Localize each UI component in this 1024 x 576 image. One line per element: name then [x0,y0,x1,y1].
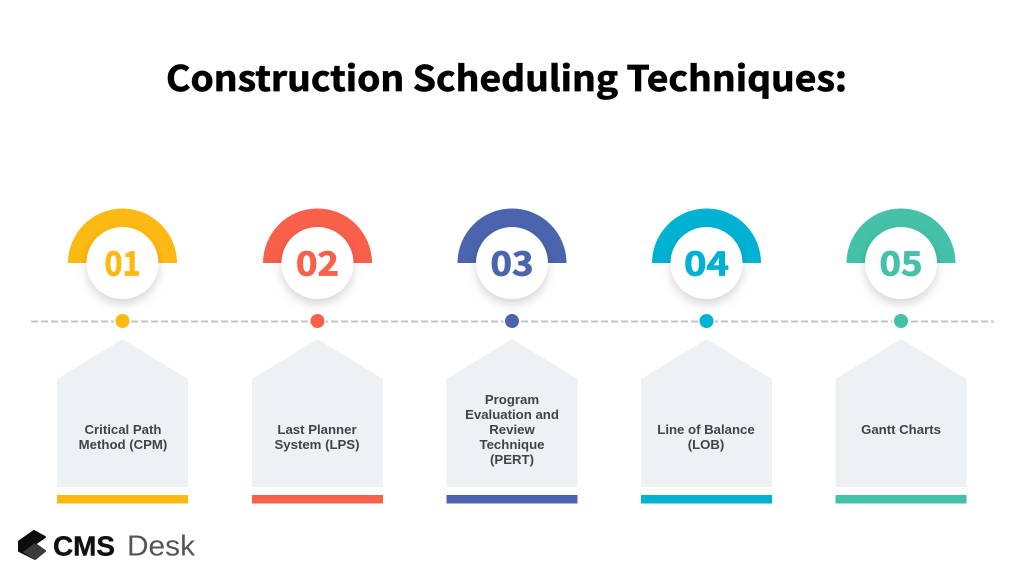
label 03: Technique [480,437,544,452]
badge 05: 05 [880,238,922,286]
badge 03: 03 [490,238,534,286]
icon: logo hexagon [19,531,45,559]
label 03: Review [489,422,535,437]
timeline dot 04 [700,314,714,328]
timeline dot 03 [505,314,519,328]
logo wordmark CMS: CMS [53,530,115,562]
colour bar 04 [641,495,772,504]
label 03: Evaluation and [465,407,559,422]
timeline dot 05 [894,314,908,328]
colour bar 02 [252,495,383,504]
badge 04 [652,208,761,299]
label 04: Line of Balance [657,422,755,437]
badge 05 [846,208,956,299]
timeline dashed line [31,320,994,322]
step 03: PERT [446,208,578,503]
colour bar 01 [57,495,188,504]
step 05: Gantt Charts [836,208,966,503]
label 01: Critical Path [85,422,161,437]
label 03: (PERT) [490,452,534,467]
card 02 [252,339,383,487]
colour bar 03 [446,495,578,504]
title: Construction Scheduling Techniques: [166,51,847,102]
card 03 [446,339,578,487]
label 03: Program [485,392,539,407]
badge 04: 04 [684,238,729,286]
timeline dot 01 [116,314,130,328]
logo: CMS Desk [19,530,196,562]
step 02: Last Planner System [252,208,383,503]
timeline dot 02 [310,314,324,328]
card 01 [57,339,188,487]
badge 01 [68,209,177,299]
label 02: Last Planner [277,422,357,437]
badge 01: 01 [104,238,140,286]
step 04: Line of Balance [641,208,772,503]
badge 02: 02 [296,238,339,286]
label 04: (LOB) [688,437,724,452]
badge 03 [458,208,566,299]
card 05 [836,339,966,487]
label 02: System (LPS) [274,437,360,452]
label 01: Method (CPM) [79,437,167,452]
colour bar 05 [836,495,966,504]
step 01: Critical Path Method [57,209,188,503]
label 05: Gantt Charts [861,422,941,437]
logo wordmark Desk: Desk [127,530,196,562]
card 04 [641,339,772,487]
badge 02 [263,208,372,299]
